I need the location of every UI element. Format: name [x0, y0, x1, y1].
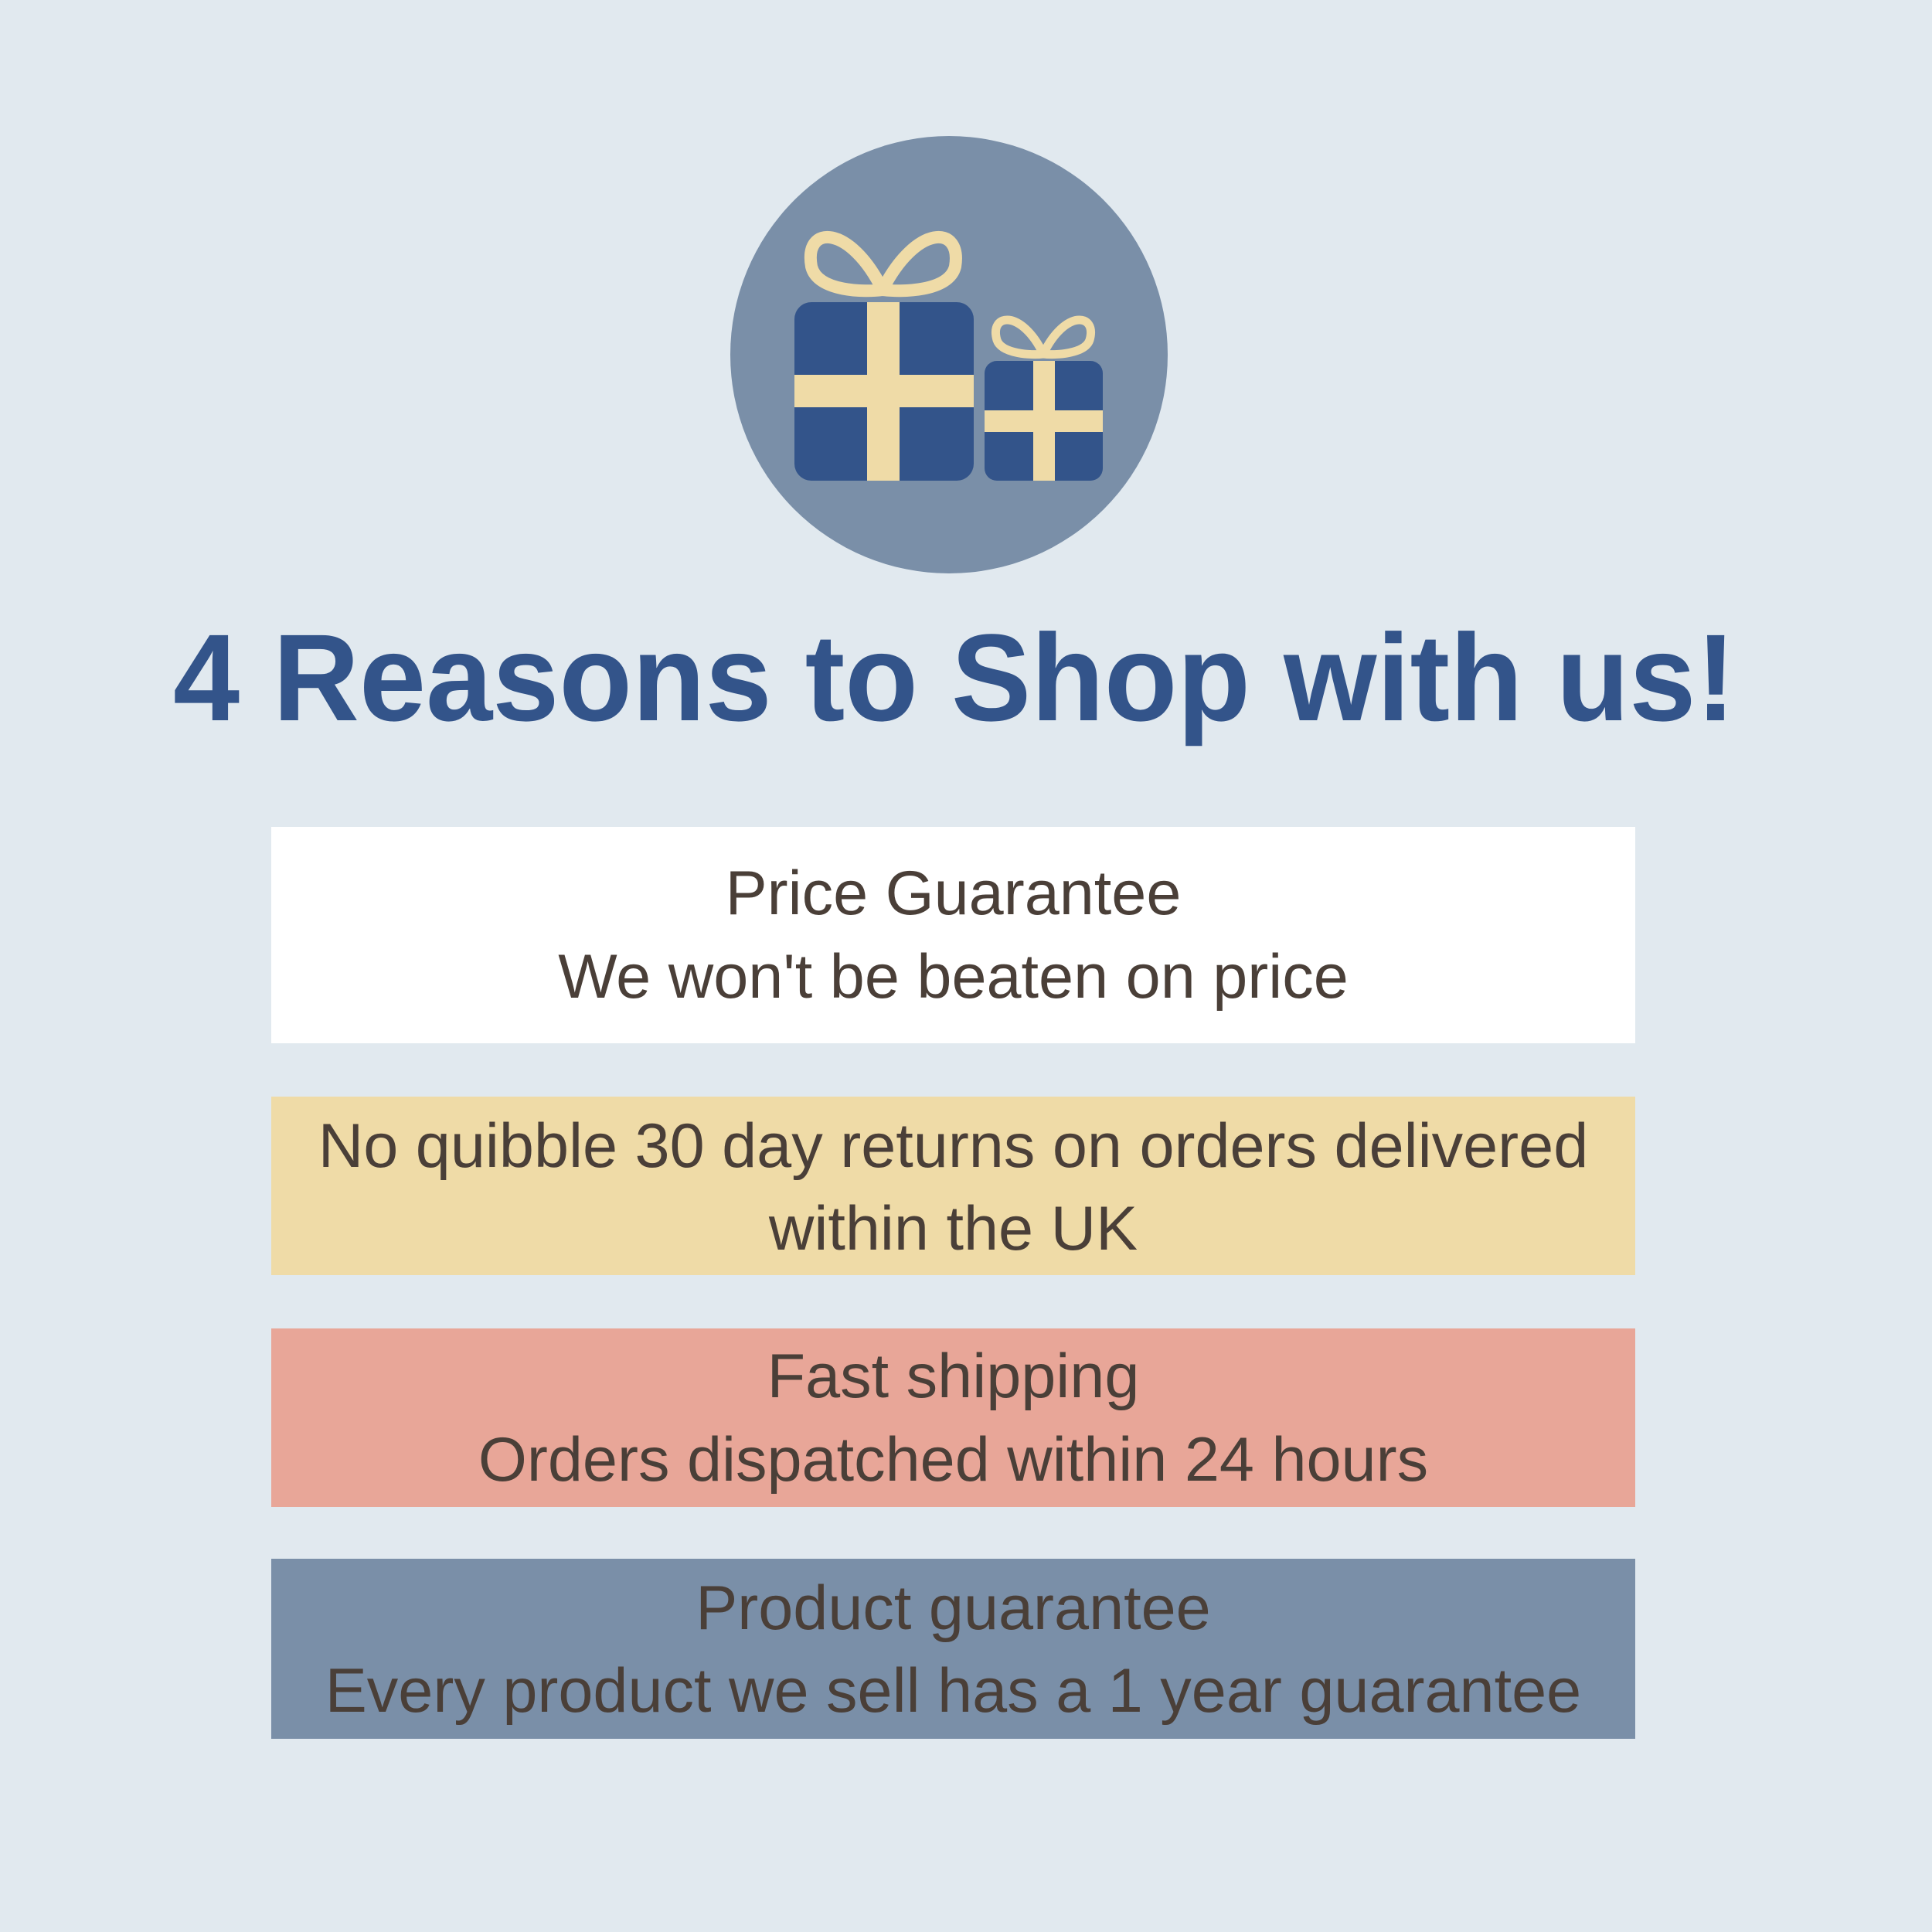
icon: gifts in circle	[730, 136, 1168, 573]
text: product guarantee: Product guarantee	[696, 1573, 1211, 1643]
panel: fast shipping: Orders dispatched within 24 hours	[478, 1425, 1428, 1495]
panel: price guarantee	[271, 827, 1635, 1043]
panel: product guarantee: Every product we sell has a 1 year guarantee	[325, 1656, 1581, 1726]
text: price guarantee: Price Guarantee	[726, 859, 1181, 928]
icon: big gift	[794, 237, 974, 481]
text: returns: No quibble 30 day returns on orders delivered	[318, 1111, 1588, 1181]
text: fast shipping: Fast shipping	[767, 1342, 1139, 1411]
panel: returns	[271, 1097, 1635, 1275]
panel: fast shipping	[271, 1328, 1635, 1507]
panel: returns: within the UK	[769, 1194, 1138, 1264]
panel: product guarantee	[271, 1559, 1635, 1739]
panel: price guarantee: We won't be beaten on price	[558, 942, 1349, 1012]
title: 4 Reasons to Shop with us!	[173, 608, 1736, 747]
icon: small gift	[985, 320, 1103, 481]
